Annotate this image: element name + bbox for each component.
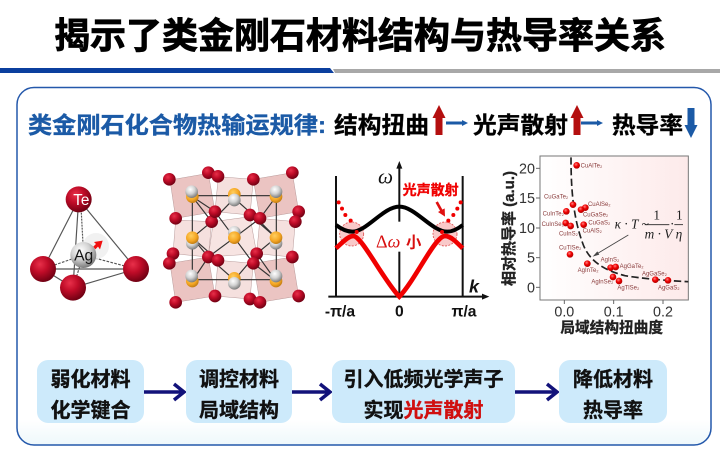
tick labels: π/a bbox=[451, 303, 477, 320]
x tick labels bbox=[554, 305, 673, 321]
formula pointer bbox=[593, 235, 628, 257]
arrow: leads to conductivity bbox=[581, 120, 603, 126]
compound labels: CuInS₂ bbox=[559, 231, 579, 237]
omega label: ω bbox=[378, 164, 393, 188]
figure: Ag-Te tetrahedron bbox=[30, 186, 149, 301]
flow step 1: 化学键合 bbox=[50, 399, 130, 422]
flow step 2: 调控材料 bbox=[199, 368, 279, 391]
heading label: 类金刚石化合物热输运规律: bbox=[28, 112, 326, 138]
compound labels: AgTlSe₂ bbox=[617, 285, 640, 291]
y tick labels: 5 bbox=[527, 251, 535, 267]
flow arrow 1 bbox=[144, 384, 184, 400]
header rule bbox=[0, 68, 720, 73]
Ag and In atoms bbox=[185, 185, 282, 290]
y tick labels: 10 bbox=[519, 221, 535, 237]
arrow: conductivity down bbox=[684, 108, 698, 138]
arrow: distortion up bbox=[432, 105, 446, 135]
data points bbox=[562, 162, 671, 284]
formula: m · V bbox=[645, 227, 674, 242]
axis arrowheads bbox=[396, 161, 489, 300]
term: optical phonon scattering: 光声散射 bbox=[473, 112, 568, 138]
y axis title: 相对热导率 (a.u.) bbox=[500, 171, 518, 286]
formula: 1 bbox=[676, 207, 683, 222]
callout: scattering: 光声散射 bbox=[403, 182, 459, 198]
title: 揭示了类金刚石材料结构与热导率关系 bbox=[54, 15, 666, 56]
tick labels: -π/a bbox=[325, 303, 355, 320]
compound labels: CuGaTe₂ bbox=[544, 195, 569, 201]
ticks bbox=[536, 168, 663, 304]
acoustic branch bbox=[336, 236, 463, 297]
compound labels: CuAlTe₂ bbox=[581, 163, 603, 169]
compound labels: CuInTe₂ bbox=[543, 211, 565, 217]
term: structural distortion: 结构扭曲 bbox=[334, 112, 429, 138]
flow step 2: 局域结构 bbox=[199, 399, 279, 422]
compound labels: CuInSe₂ bbox=[542, 222, 565, 228]
Ag atom: Ag bbox=[74, 247, 93, 264]
compound labels bbox=[542, 163, 680, 291]
flow step 4: 降低材料 bbox=[573, 368, 653, 391]
k label: k bbox=[469, 277, 480, 297]
arrow: scattering up bbox=[570, 105, 584, 135]
flow step 3: 实现光声散射 bbox=[364, 398, 484, 422]
flow step 2 bbox=[186, 360, 292, 423]
Te atoms bbox=[163, 166, 305, 309]
Te atom: Te bbox=[73, 192, 89, 209]
flow step 1 bbox=[37, 360, 144, 423]
y tick labels bbox=[519, 161, 535, 296]
main panel bbox=[17, 88, 711, 445]
cell edges bbox=[192, 196, 276, 281]
y tick labels: 15 bbox=[519, 191, 535, 207]
compound labels: AgInS₂ bbox=[601, 258, 620, 264]
dotted branch bbox=[337, 200, 463, 234]
delta omega label: 小 bbox=[406, 234, 422, 251]
axes bbox=[328, 167, 483, 297]
heading: thermal transport rule bbox=[28, 105, 698, 138]
y tick labels: 0 bbox=[527, 280, 535, 296]
x tick labels: 0.0 bbox=[554, 305, 574, 321]
delta omega label bbox=[376, 231, 422, 251]
displacement arrow bbox=[93, 241, 103, 249]
compound labels: AgInTe₂ bbox=[578, 268, 599, 274]
chart: conductivity vs distortion bbox=[500, 156, 688, 336]
flow step 3 bbox=[332, 360, 515, 423]
plot frame bbox=[540, 156, 688, 300]
flow step 3: 引入低频光学声子 bbox=[344, 368, 504, 391]
callout arrow bbox=[437, 202, 445, 217]
formula: · bbox=[670, 217, 674, 232]
y tick labels: 20 bbox=[519, 161, 535, 177]
compound labels: AgInSe₂ bbox=[591, 279, 614, 285]
ghost Ag atom bbox=[83, 233, 109, 259]
compound labels: AgGaS₂ bbox=[658, 285, 680, 291]
arrow: leads to phonon scattering bbox=[446, 120, 468, 126]
formula: 1 bbox=[653, 207, 660, 222]
compound labels: CuGaSe₂ bbox=[583, 213, 609, 219]
x tick labels: 0.2 bbox=[653, 305, 673, 321]
Te atoms at base bbox=[30, 256, 149, 301]
flow arrow 2 bbox=[292, 384, 330, 400]
term: thermal conductivity: 热导率 bbox=[612, 112, 683, 138]
compound labels: AgGaSe₂ bbox=[642, 271, 668, 277]
compound labels: AgGaTe₂ bbox=[620, 264, 644, 270]
compound labels: CuAlSe₂ bbox=[588, 202, 611, 208]
pink coordination polyhedra bbox=[170, 173, 299, 302]
trend line bbox=[571, 157, 688, 282]
tick labels: 0 bbox=[395, 303, 404, 320]
scattering zones bbox=[340, 222, 457, 246]
chart: phonon dispersion bbox=[325, 161, 489, 320]
x axis title: 局域结构扭曲度 bbox=[560, 318, 663, 336]
flow arrow 3 bbox=[515, 384, 557, 400]
flow step 1: 弱化材料 bbox=[50, 368, 130, 391]
flow step 4: 热导率 bbox=[583, 399, 643, 422]
formula: κ · T ~ bbox=[615, 217, 649, 232]
formula: η bbox=[676, 227, 683, 242]
compound labels: CuGaS₂ bbox=[588, 221, 611, 227]
compound labels: CuAlS₂ bbox=[583, 229, 603, 235]
compound labels: CuTlSe₂ bbox=[559, 246, 582, 252]
flow step 4 bbox=[559, 360, 667, 423]
delta omega label: Δω bbox=[376, 231, 400, 251]
x tick labels: 0.1 bbox=[604, 305, 624, 321]
optical branch bbox=[336, 207, 463, 232]
figure: crystal unit cell bbox=[163, 166, 305, 309]
tick labels bbox=[325, 303, 477, 320]
formula bbox=[615, 207, 683, 242]
